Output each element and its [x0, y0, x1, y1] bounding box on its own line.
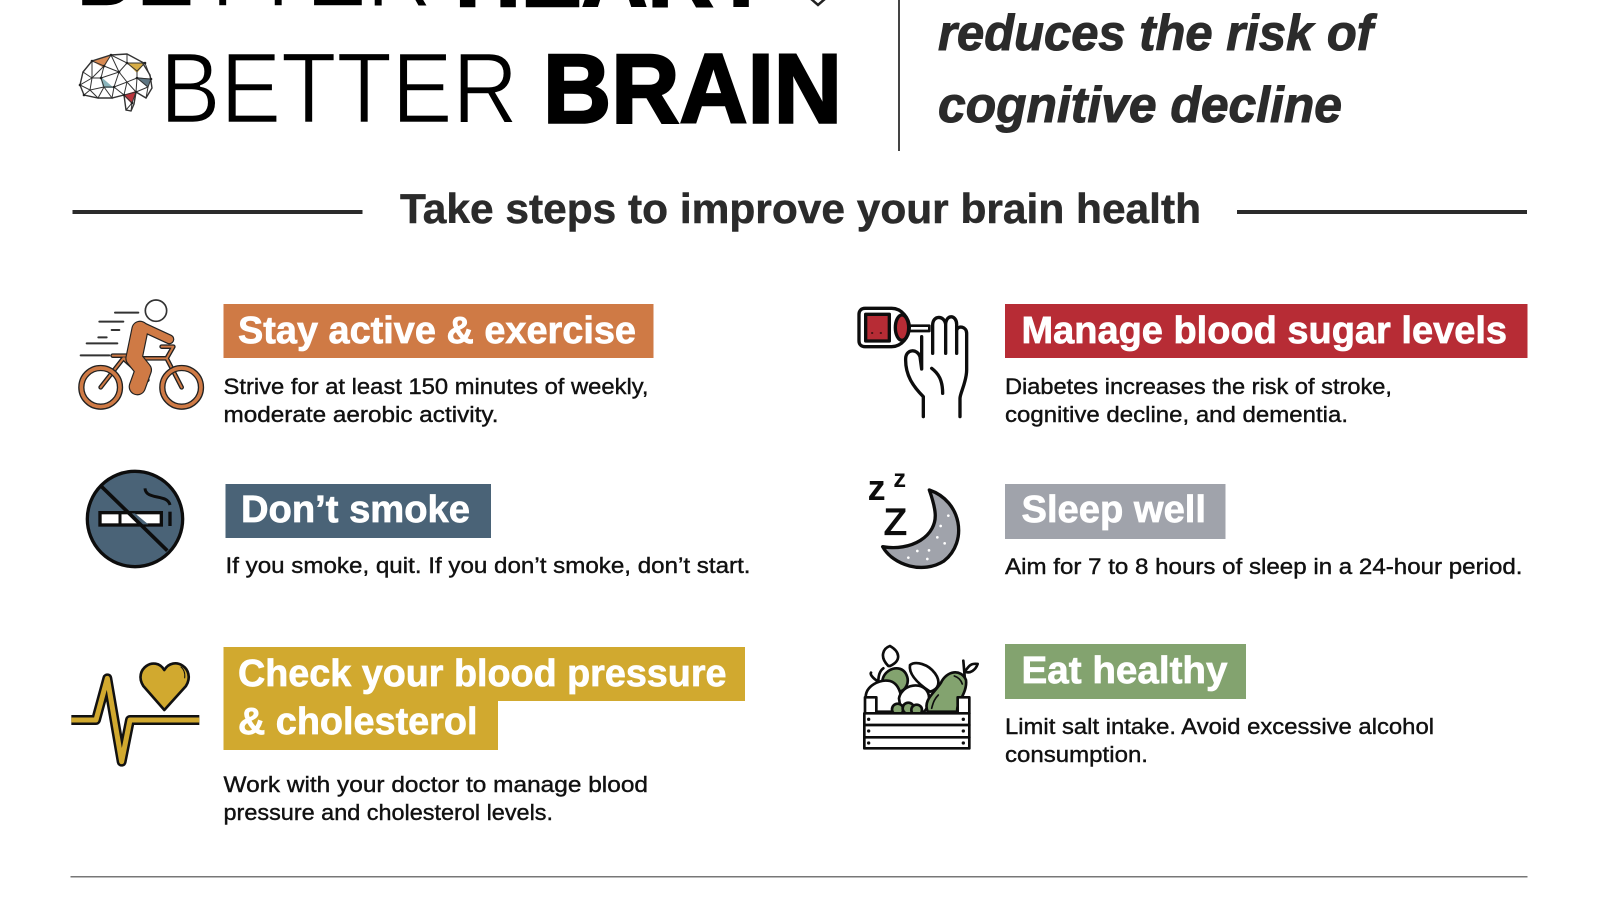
label bar: Stay active & exercise: Stay active & exercise — [238, 310, 636, 352]
body text: consumption. — [1005, 742, 1148, 767]
icon: produce crate — [864, 646, 978, 748]
body text: cognitive decline, and dementia. — [1005, 402, 1348, 427]
tagline: cognitive decline — [938, 77, 1342, 133]
icon: moon and Zs: z — [893, 465, 906, 493]
panel: don't smoke — [87, 471, 751, 578]
label bar: Check your blood pressure & cholesterol: Check your blood pressure — [238, 653, 726, 695]
icon: no smoking — [87, 471, 183, 567]
title line: Better Brain — [160, 32, 842, 144]
body text — [1005, 374, 1392, 427]
body text: Work with your doctor to manage blood — [224, 772, 648, 797]
body text — [224, 772, 648, 825]
label bar: Sleep well — [1005, 484, 1226, 539]
tagline — [938, 5, 1377, 133]
label bar: Check your blood pressure & cholesterol: & cholesterol — [238, 701, 478, 743]
panel: stay active — [81, 300, 653, 427]
label bar: Sleep well: Sleep well — [1022, 489, 1206, 531]
title line: Better Brain: BRAIN — [543, 34, 842, 144]
icon: heart and pulse — [71, 663, 199, 762]
title: Better Heart Better Brain — [74, 0, 842, 144]
label bar: Don't smoke — [226, 484, 491, 538]
panel: eat healthy — [864, 644, 1434, 767]
title line: Better Heart (cropped at top) — [74, 0, 826, 28]
body text — [224, 374, 648, 427]
label bar: Eat healthy: Eat healthy — [1022, 650, 1228, 692]
icon: moon and Zs: z — [868, 467, 886, 508]
panel: blood pressure — [71, 647, 745, 825]
section heading: Take steps to improve your brain health — [400, 185, 1201, 232]
body text: moderate aerobic activity. — [224, 402, 498, 427]
label bar: Manage blood sugar levels: Manage blood sugar levels — [1022, 310, 1507, 352]
tagline: reduces the risk of — [938, 5, 1377, 61]
label bar: Check your blood pressure & cholesterol — [224, 647, 745, 750]
icon: network brain — [79, 54, 152, 111]
title line: Better Brain: BETTER — [160, 32, 518, 144]
label bar: Eat healthy — [1005, 644, 1246, 699]
panel: blood sugar — [859, 304, 1528, 427]
icon: cyclist — [81, 300, 201, 407]
body text: Aim for 7 to 8 hours of sleep in a 24-hour period. — [1005, 554, 1522, 579]
label bar: Don't smoke: Don’t smoke — [241, 489, 470, 531]
icon: moon and Zs: Z — [884, 500, 907, 542]
panel: sleep well — [868, 465, 1522, 579]
body text: pressure and cholesterol levels. — [224, 800, 553, 825]
icon: glucose meter and hand — [859, 308, 967, 417]
body text: Diabetes increases the risk of stroke, — [1005, 374, 1392, 399]
body text — [1005, 714, 1434, 767]
icon: moon and Zs — [868, 465, 959, 567]
body text: If you smoke, quit. If you don’t smoke, don’t start. — [226, 553, 750, 578]
vertical divider — [898, 0, 900, 151]
body text: Strive for at least 150 minutes of weekly, — [224, 374, 648, 399]
body text: Limit salt intake. Avoid excessive alcohol — [1005, 714, 1434, 739]
section heading — [72, 185, 1527, 232]
